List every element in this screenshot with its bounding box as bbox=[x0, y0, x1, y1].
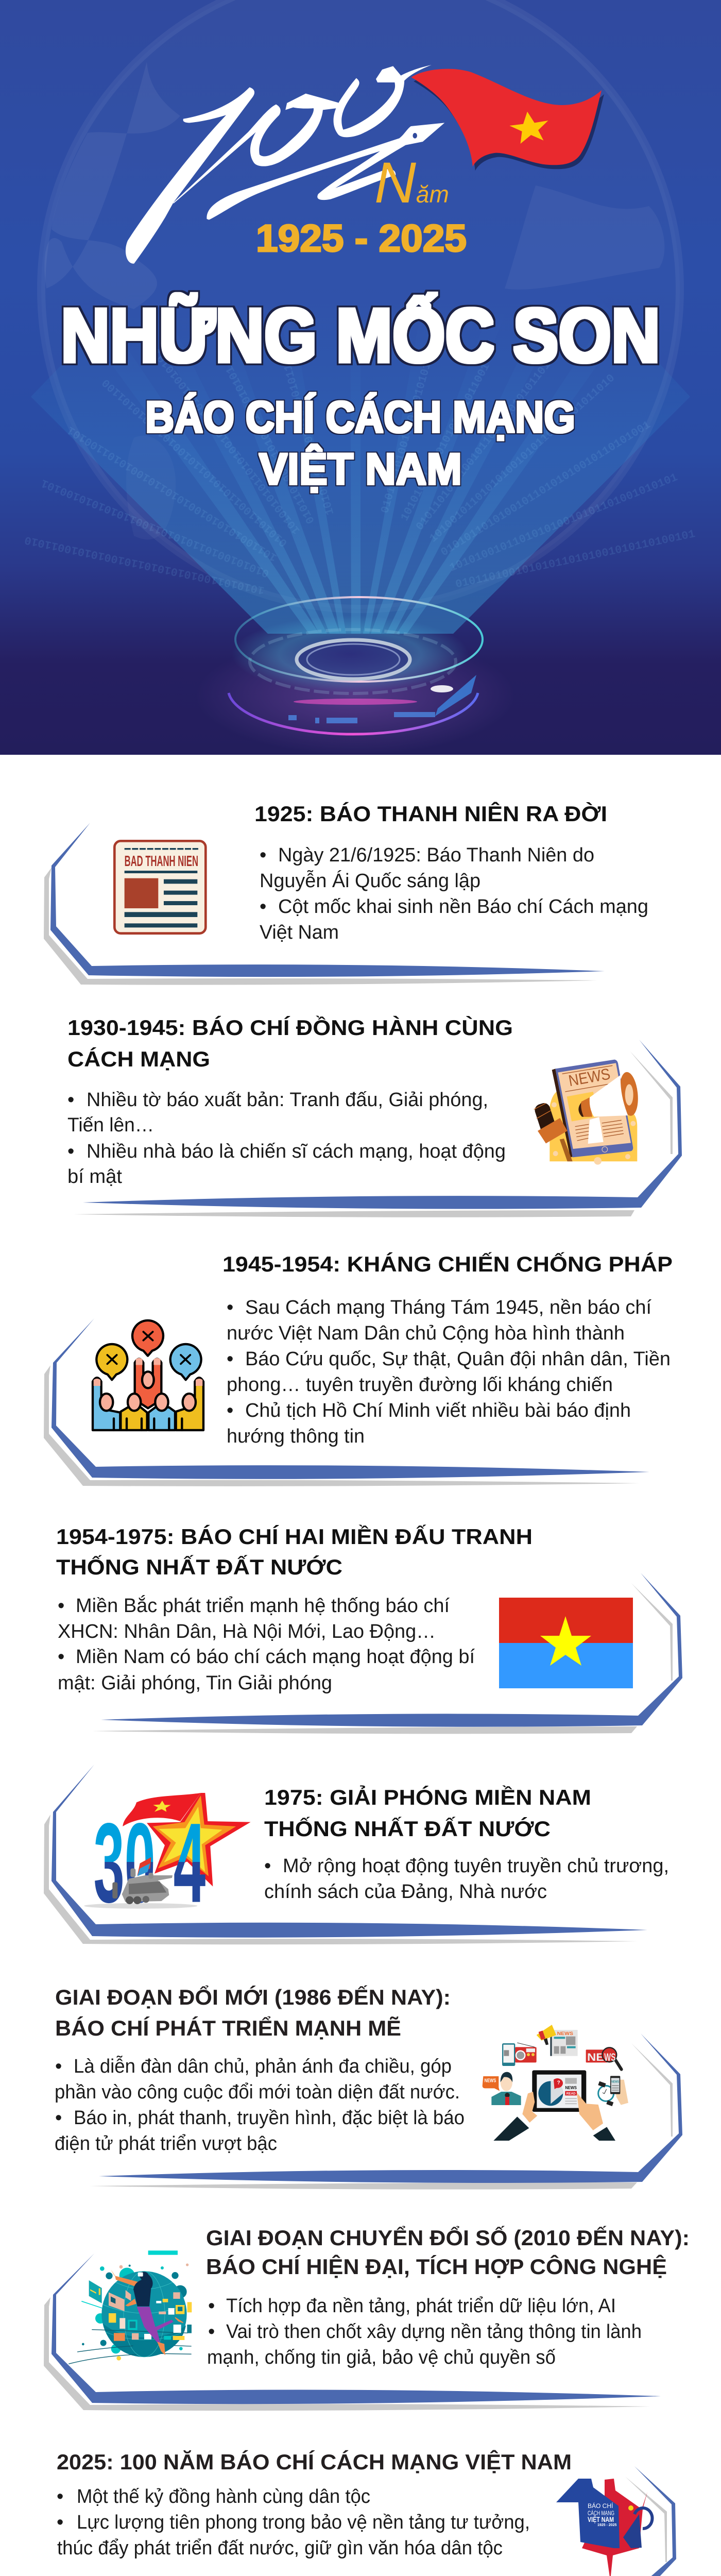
heading 7: GIAI ĐOẠN CHUYỂN ĐỔI SỐ (2010 ĐẾN NAY): bbox=[206, 2225, 690, 2250]
body text 8: • bbox=[57, 2486, 63, 2507]
body text 1: Ngày 21/6/1925: Báo Thanh Niên do bbox=[278, 844, 594, 866]
body text 3: nước Việt Nam Dân chủ Cộng hòa hình thành bbox=[227, 1323, 625, 1344]
icon: 100 years press emblem: VIỆT NAM bbox=[588, 2515, 614, 2523]
body text 7: Tích hợp đa nền tảng, phát triển dữ liệu lớn, AI bbox=[226, 2295, 616, 2317]
hologram platform bbox=[196, 597, 515, 755]
panel: 1930-1945 bbox=[67, 1015, 682, 1217]
body text 7: mạnh, chống tin giả, bảo vệ chủ quyền số bbox=[207, 2347, 556, 2368]
body text 2: • bbox=[67, 1141, 74, 1162]
body text 3: phong… tuyên truyền đường lối kháng chiến bbox=[227, 1374, 613, 1396]
body text 6 bbox=[55, 2055, 465, 2155]
icon: tablet with globe: READ bbox=[566, 2092, 576, 2096]
body text 3: • bbox=[227, 1400, 233, 1421]
body text 3: hướng thông tin bbox=[227, 1426, 365, 1447]
icon: megaphone and newspaper: NEWS bbox=[557, 2031, 573, 2036]
icon: VR user over digital globe bbox=[68, 2250, 192, 2364]
frame 8 bbox=[80, 2466, 676, 2576]
body text 1 bbox=[260, 844, 648, 943]
frame 6 bbox=[90, 2033, 682, 2190]
binary code streams: 010110100101010110101001010110100101 bbox=[454, 528, 696, 591]
body text 4: mật: Giải phóng, Tin Giải phóng bbox=[58, 1672, 332, 1694]
body text 2: • bbox=[67, 1089, 74, 1111]
icon: 30/4 emblem with star and tank: 4 bbox=[174, 1800, 205, 1926]
icon: news magnifier bbox=[586, 2047, 622, 2070]
heading 6 bbox=[55, 1984, 451, 2040]
icon: megaphone and newspaper bbox=[537, 2025, 578, 2056]
body text 7: Vai trò then chốt xây dựng nền tảng thông tin lành bbox=[226, 2321, 642, 2343]
binary code streams: 010101101010010110101010010110101001 bbox=[439, 418, 653, 559]
icon: digital media collage bbox=[483, 2025, 628, 2141]
icon: news tablet with megaphone and microphone: NEWS bbox=[567, 1065, 612, 1090]
binary code streams bbox=[24, 341, 696, 597]
body text 6: • bbox=[55, 2107, 62, 2129]
icon: reporter: NEWS bbox=[485, 2078, 496, 2084]
heading 1: 1925: BÁO THANH NIÊN RA ĐỜI bbox=[254, 801, 607, 826]
script word Năm: Năm bbox=[374, 150, 449, 215]
red waving flag with star bbox=[411, 69, 604, 171]
icon: 100 years press emblem: CÁCH MẠNG bbox=[588, 2509, 614, 2517]
icon: 100 years press emblem: BÁO CHÍ bbox=[588, 2502, 613, 2510]
panel: 2025 bbox=[57, 2449, 676, 2576]
frame 4 bbox=[92, 1573, 682, 1734]
icon: raised hands with vote bubbles bbox=[93, 1320, 203, 1430]
heading 2 bbox=[67, 1015, 513, 1071]
body text 4 bbox=[58, 1595, 475, 1694]
icon: National Liberation Front flag bbox=[499, 1598, 633, 1688]
body text 4: • bbox=[58, 1595, 64, 1617]
frame 7 bbox=[44, 2253, 661, 2411]
body text 6: Báo in, phát thanh, truyền hình, đặc biệt là báo bbox=[74, 2107, 465, 2129]
binary code streams: 1010010101101010010101101010010101 bbox=[150, 346, 303, 536]
heading 8: 2025: 100 NĂM BÁO CHÍ CÁCH MẠNG VIỆT NAM bbox=[57, 2449, 572, 2474]
binary code streams: 10101001011010100101011001 bbox=[398, 361, 493, 523]
binary code streams: 101001011010101001010110100101011010 bbox=[427, 371, 617, 545]
body text 3: • bbox=[227, 1297, 233, 1318]
body text 2: Nhiều tờ báo xuất bản: Tranh đấu, Giải phóng, bbox=[87, 1089, 488, 1111]
binary code streams: 0101101010100101101001010101101010 bbox=[414, 343, 566, 533]
body text 7: • bbox=[208, 2321, 215, 2343]
binary code streams: 010101100110101011010010101010101100 bbox=[100, 376, 290, 549]
heading 2: 1930-1945: BÁO CHÍ ĐỒNG HÀNH CÙNG bbox=[67, 1015, 513, 1040]
panel: chuyển đổi số bbox=[44, 2225, 690, 2411]
icon: tablet with globe bbox=[532, 2070, 586, 2112]
icon: watch and phone: NEWS bbox=[611, 2081, 619, 2084]
heading 7: BÁO CHÍ HIỆN ĐẠI, TÍCH HỢP CÔNG NGHỆ bbox=[206, 2254, 667, 2279]
years 1925 - 2025: 1925 - 2025 bbox=[256, 217, 467, 260]
body text 8 bbox=[57, 2486, 530, 2559]
body text 3: Báo Cứu quốc, Sự thật, Quân đội nhân dân, Tiền bbox=[245, 1348, 671, 1370]
icon: 30/4 emblem with star and tank: 30 bbox=[94, 1800, 156, 1926]
icon: watch and phone bbox=[598, 2076, 628, 2106]
heading 3: 1945-1954: KHÁNG CHIẾN CHỐNG PHÁP bbox=[222, 1251, 673, 1276]
heading 6: GIAI ĐOẠN ĐỔI MỚI (1986 ĐẾN NAY): bbox=[55, 1984, 451, 2009]
body text 8: Một thế kỷ đồng hành cùng dân tộc bbox=[77, 2486, 370, 2507]
body text 4: Miền Bắc phát triển mạnh hệ thống báo chí bbox=[76, 1595, 450, 1617]
binary code streams: 101010110010101010110100101010011010 bbox=[24, 533, 266, 597]
heading 6: BÁO CHÍ PHÁT TRIỂN MẠNH MẼ bbox=[55, 2015, 401, 2040]
body text 6: phần vào công cuộc đổi mới toàn diện đất nước. bbox=[55, 2081, 460, 2103]
light rays from platform bbox=[31, 258, 690, 634]
body text 1: • bbox=[260, 896, 266, 918]
heading 5: 1975: GIẢI PHÓNG MIỀN NAM bbox=[264, 1785, 591, 1809]
body text 8: Lực lượng tiên phong trong bảo vệ nền tảng tư tưởng, bbox=[77, 2512, 530, 2533]
panel: Đổi mới 1986 bbox=[55, 1984, 682, 2190]
icon: tablet with globe: NEWS bbox=[565, 2086, 577, 2090]
main title: NHỮNG MỐC SON bbox=[61, 293, 660, 378]
body text 4: • bbox=[58, 1646, 64, 1668]
heading 5: THỐNG NHẤT ĐẤT NƯỚC bbox=[264, 1816, 551, 1841]
subtitle line two: VIỆT NAM bbox=[259, 445, 462, 494]
icon: tablet with globe: ? bbox=[557, 2080, 560, 2086]
icon: news tablet with megaphone and microphone bbox=[533, 1060, 640, 1165]
panel: 1945-1954 bbox=[44, 1251, 673, 1486]
binary code streams: 101010010110101010010101101001010101 bbox=[448, 471, 679, 574]
heading 2: CÁCH MẠNG bbox=[67, 1047, 210, 1071]
icon: news magnifier: WS bbox=[604, 2051, 615, 2063]
panel: 1954-1975 bbox=[56, 1524, 682, 1734]
body text 4: Miền Nam có báo chí cách mạng hoạt động bí bbox=[76, 1646, 475, 1668]
body text 5 bbox=[264, 1855, 669, 1903]
heading 5 bbox=[264, 1785, 591, 1841]
body text 6: điện tử phát triển vượt bậc bbox=[55, 2133, 277, 2155]
body text 1: Cột mốc khai sinh nền Báo chí Cách mạng bbox=[278, 896, 648, 918]
body text 4: XHCN: Nhân Dân, Hà Nội Mới, Lao Động… bbox=[58, 1621, 436, 1642]
binary code streams: 01011010010101010110010101 bbox=[224, 364, 318, 526]
hero banner bbox=[0, 0, 721, 755]
panel: 1925 Báo Thanh Niên bbox=[44, 801, 648, 985]
heading 7 bbox=[206, 2225, 690, 2279]
icon: newspaper Báo Thanh Niên: BAD THANH NIEN bbox=[125, 853, 198, 870]
frame 1 bbox=[44, 823, 605, 985]
binary code streams: 010101001011010101100110101010100101 bbox=[39, 476, 271, 580]
panel: 1975 bbox=[44, 1765, 669, 1944]
heading 4: THỐNG NHẤT ĐẤT NƯỚC bbox=[56, 1554, 342, 1579]
icon: newspaper Báo Thanh Niên bbox=[114, 841, 205, 934]
body text 2: Nhiều nhà báo là chiến sĩ cách mạng, hoạt động bbox=[87, 1141, 506, 1162]
globe backdrop bbox=[41, 0, 680, 609]
icon: reporter bbox=[483, 2072, 521, 2105]
body text 3 bbox=[227, 1297, 671, 1447]
logo: 100 years pen signature bbox=[126, 65, 444, 264]
body text 5: • bbox=[264, 1855, 271, 1877]
heading 4: 1954-1975: BÁO CHÍ HAI MIỀN ĐẤU TRANH bbox=[56, 1524, 533, 1549]
body text 8: • bbox=[57, 2512, 63, 2533]
subtitle line one: BÁO CHÍ CÁCH MẠNG bbox=[145, 393, 575, 442]
frame 2 bbox=[74, 1040, 682, 1217]
binary code streams: 101100101010100101011010010101100101 bbox=[65, 423, 280, 564]
body text 6: • bbox=[55, 2056, 62, 2077]
body text 7: • bbox=[208, 2295, 215, 2317]
binary code streams: 01010110100101011010101010 bbox=[379, 341, 440, 515]
body text 1: • bbox=[260, 844, 266, 866]
body text 5: Mở rộng hoạt động tuyên truyền chủ trương, bbox=[283, 1855, 669, 1877]
body text 7 bbox=[207, 2295, 642, 2368]
body text 1: Việt Nam bbox=[260, 922, 339, 943]
icon: tablet and radio bbox=[502, 2043, 537, 2066]
body text 3: Sau Cách mạng Tháng Tám 1945, nền báo chí bbox=[245, 1297, 651, 1318]
body text 3: Chủ tịch Hồ Chí Minh viết nhiều bài báo định bbox=[245, 1400, 631, 1421]
frame 5 bbox=[44, 1765, 647, 1944]
body text 3: • bbox=[227, 1348, 233, 1370]
body text 1: Nguyễn Ái Quốc sáng lập bbox=[260, 870, 480, 892]
heading 4 bbox=[56, 1524, 533, 1579]
icon: news magnifier: NE bbox=[587, 2051, 604, 2063]
body text 2: Tiến lên… bbox=[67, 1114, 154, 1136]
binary code streams: 10100101011010101001011010 bbox=[276, 343, 337, 516]
icon: 100 years press emblem: 1925 - 2025 bbox=[597, 2523, 616, 2527]
body text 2 bbox=[67, 1089, 506, 1188]
icon: 100 years press emblem bbox=[556, 2479, 652, 2576]
frame 3 bbox=[44, 1318, 649, 1486]
body text 6: Là diễn đàn dân chủ, phản ánh đa chiều, góp bbox=[74, 2055, 452, 2077]
body text 8: thúc đẩy phát triển đất nước, giữ gìn văn hóa dân tộc bbox=[57, 2537, 503, 2559]
body text 5: chính sách của Đảng, Nhà nước bbox=[264, 1881, 547, 1903]
body text 2: bí mật bbox=[67, 1166, 122, 1188]
